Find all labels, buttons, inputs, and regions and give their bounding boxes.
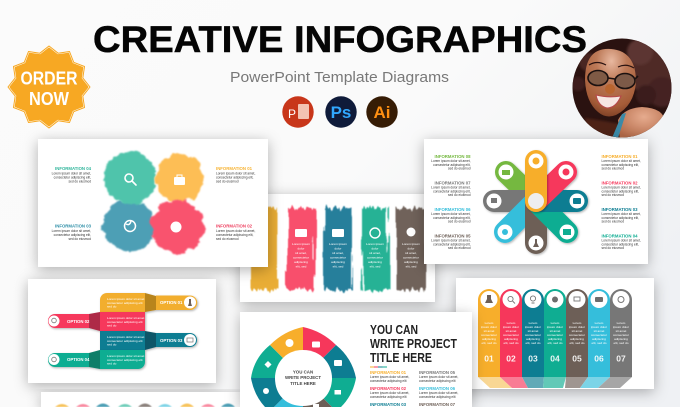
blue brush strip: consectetur [330,256,346,260]
column 03: elit, sed do [526,341,541,345]
column 02 [500,289,522,377]
column 06: adipiscing [592,337,606,341]
option 04 ribbon: Lorem ipsum dolor sit amet [107,354,144,358]
column 05: elit, sed do [570,341,585,345]
red brush strip: sit amet, [295,251,307,255]
column 03: consectetur [525,333,541,337]
information 05: Lorem ipsum dolor sit amet, [419,375,458,379]
text: information 03: sed do eiusmod [68,237,91,241]
column 07: sit amet [616,329,627,333]
text: information 04 right [602,234,641,250]
icon: globe [124,220,136,232]
green brush strip: Lorem ipsum [366,242,384,246]
column 02: adipiscing [504,337,518,341]
column 02: 02 [506,354,516,364]
column 06: 06 [594,354,604,364]
slide: ribbon options [28,279,216,383]
text: information 01 right: sed do eiusmod [602,167,624,171]
option 03 ribbon: sed do [107,343,117,347]
text: information 01: Lorem ipsum dolor sit amet, [216,172,255,176]
slide: four watercolor blobs [38,139,268,267]
column 06: Lorem [595,321,603,325]
red blob [151,200,204,253]
information 05 [419,370,458,383]
option 03 ribbon [100,331,197,350]
green brush strip: consectetur [367,256,383,260]
order now badge [8,46,90,128]
option 02 ribbon: sed do [107,324,117,328]
text: information 05: sed do eiusmod [448,246,471,250]
project title line 2: WRITE PROJECT [370,337,457,351]
column 05 [566,289,588,377]
text: information 02: INFORMATION 02 [216,224,253,228]
text: information 05 [431,234,471,250]
green brush strip: sit amet, [369,251,381,255]
option 02 ribbon: OPTION 02 [67,319,90,324]
text: information 01 right: INFORMATION 01 [602,154,638,159]
option 01 ribbon: consectetur adipiscing elit [107,301,143,305]
order now badge: NOW [29,89,69,109]
column 01: elit, sed do [482,341,497,345]
column 01: ipsum dolor [481,325,497,329]
information 01: INFORMATION 01 [370,370,407,375]
text: information 04 [52,166,92,184]
option 04 ribbon: OPTION 04 [67,357,90,362]
column 04: adipiscing [548,337,562,341]
text: information 04 right: consectetur adipiscing elit, [602,242,639,246]
column 01 [478,289,500,377]
text: information 04 right: Lorem ipsum dolor sit amet, [602,238,641,242]
column 03: ipsum dolor [525,325,541,329]
option 04 ribbon: consectetur adipiscing elit [107,358,143,362]
text: information 03 right [602,207,641,224]
text: information 06: INFORMATION 06 [435,207,471,212]
column 05: sit amet [572,329,583,333]
text: information 04: Lorem ipsum dolor sit amet, [52,172,91,176]
blue brush strip: dolor [335,246,341,250]
icon: PowerPoint: P [288,107,296,121]
column 02: Lorem [507,321,515,325]
column 02: elit, sed do [504,341,519,345]
column 01: adipiscing [482,337,496,341]
title: CREATIVE INFOGRAPHICS [93,19,587,60]
option 01 ribbon: Lorem ipsum dolor sit amet [107,297,144,301]
text: information 03: consectetur adipiscing elit, [54,233,91,237]
text: information 06: Lorem ipsum dolor sit amet, [431,212,470,216]
petal diagram [486,150,584,250]
column 07: elit, sed do [614,341,629,345]
icon: Photoshop: Ps [331,103,351,122]
text: information 07: sed do eiusmod [448,193,471,197]
brown brush strip: elit, sed [406,264,417,268]
brown brush strip: Lorem ipsum [402,242,420,246]
wheel centre text: WRITE PROJECT [285,375,321,380]
option 04 ribbon [48,350,145,369]
text: information 05: consectetur adipiscing elit, [433,242,471,246]
column 04: ipsum dolor [547,325,563,329]
wheel diagram [251,327,356,407]
text: information 08: INFORMATION 08 [435,154,471,159]
column 04: sit amet [550,329,561,333]
text: information 01 [216,166,255,184]
text: information 02: Lorem ipsum dolor sit amet, [216,229,255,233]
column 03: adipiscing [526,337,540,341]
text: information 02 right: sed do eiusmod [602,193,624,197]
information 05: consectetur adipiscing elit [419,379,456,383]
brown brush strip [397,208,425,290]
order now badge: ORDER [20,68,78,88]
option 02 ribbon [48,312,145,331]
column 01: consectetur [481,333,497,337]
column 07: adipiscing [614,337,628,341]
yellow blob [156,154,204,202]
column 01: 01 [484,354,494,364]
column 07 [610,289,632,377]
text: information 01 right [602,154,641,171]
text: information 03 right: sed do eiusmod [602,220,624,224]
icon: magnifier [125,174,136,185]
column 02: ipsum dolor [503,325,519,329]
icon: Illustrator [366,96,398,128]
wheel centre text: TITLE HERE [290,381,316,386]
text: information 02 right: INFORMATION 02 [602,180,638,186]
text: information 01: sed do eiusmod [216,180,239,184]
text: information 07: Lorem ipsum dolor sit amet, [431,186,470,190]
text: information 03 right: INFORMATION 03 [602,207,638,212]
information 01 [370,370,409,383]
text: information 06: sed do eiusmod [448,220,471,224]
option 01 ribbon: OPTION 01 [160,300,183,305]
information 01: Lorem ipsum dolor sit amet, [370,375,409,379]
text: information 01 right: consectetur adipiscing elit, [602,163,639,167]
text: information 08: sed do eiusmod [448,167,471,171]
text: information 03: INFORMATION 03 [55,224,92,228]
column 05: 05 [572,354,582,364]
column 03: Lorem [529,321,537,325]
icon: briefcase [174,175,185,185]
column 04 [544,289,566,377]
color accent line [370,366,387,368]
blue brush strip: sit amet, [332,251,344,255]
text: information 02 right: consectetur adipiscing elit, [602,189,639,193]
column 06: consectetur [591,333,607,337]
text: information 04: consectetur adipiscing elit, [54,176,91,180]
option 03 ribbon: consectetur adipiscing elit [107,339,143,343]
icon: Photoshop [325,96,357,128]
information 06: Lorem ipsum dolor sit amet, [419,391,458,395]
column 03 [522,289,544,377]
column shadow trapezoids [478,377,632,388]
column 07: Lorem [617,321,625,325]
slide: seven numbered columns [456,278,654,389]
text: information 08: consectetur adipiscing elit, [433,163,471,167]
information 07: INFORMATION 07 [419,402,456,407]
brown brush strip: dolor [408,246,414,250]
information 06 [419,386,458,399]
icon: Illustrator: Ai [374,103,390,122]
column 04: elit, sed do [548,341,563,345]
information 02: Lorem ipsum dolor sit amet, [370,391,409,395]
column 07: ipsum dolor [613,325,629,329]
blue brush strip: Lorem ipsum [329,242,347,246]
blue blob [103,200,155,252]
red brush strip: adipiscing [294,260,308,264]
red brush strip: Lorem ipsum [292,242,310,246]
column 06: ipsum dolor [591,325,607,329]
information 02: consectetur adipiscing elit [370,395,407,399]
column 02: consectetur [503,333,519,337]
text: information 02 [216,224,255,241]
option 04 ribbon: sed do [107,362,117,366]
project title: YOU CAN [370,323,418,337]
text: information 05: Lorem ipsum dolor sit amet, [431,238,470,242]
brown brush strip: sit amet, [405,251,417,255]
red brush strip: elit, sed [296,264,307,268]
text: information 04 right: sed do eiusmod [602,246,624,250]
option 03 ribbon: Lorem ipsum dolor sit amet [107,335,144,339]
text: information 07: consectetur adipiscing elit, [433,189,471,193]
text: information 04 right: INFORMATION 04 [602,234,638,238]
information 02 [370,386,409,399]
wheel centre text: YOU CAN [293,370,313,374]
information 03: INFORMATION 03 [370,402,407,407]
slide: project wheel [240,312,472,407]
column 06 [588,289,610,377]
text: information 01: consectetur adipiscing elit, [216,176,253,180]
text: information 01: INFORMATION 01 [216,166,253,171]
blue brush strip [323,208,352,290]
icon: head [170,222,182,232]
subtitle: PowerPoint Template Diagrams [230,70,449,86]
text: information 06 [431,207,471,224]
slide: partially visible circles row [41,392,240,407]
column 05: ipsum dolor [569,325,585,329]
information 01: consectetur adipiscing elit [370,379,407,383]
column 06: sit amet [594,329,605,333]
column 04: 04 [550,354,560,364]
text: information 05: INFORMATION 05 [435,234,471,238]
green brush strip [362,208,389,290]
column 01: sit amet [484,329,495,333]
text: information 08: Lorem ipsum dolor sit amet, [431,159,470,163]
text: information 03 right: Lorem ipsum dolor sit amet, [602,212,641,216]
information 02: INFORMATION 02 [370,386,407,391]
brown brush strip: consectetur [403,256,419,260]
text: information 02: consectetur adipiscing elit, [216,233,253,237]
text: information 01 right: Lorem ipsum dolor sit amet, [602,159,641,163]
teal blob [104,152,156,204]
information 06: INFORMATION 06 [419,386,456,391]
text: information 03 [52,224,92,241]
column 04: Lorem [551,321,559,325]
text: information 08 [431,154,471,171]
option 02 ribbon: Lorem ipsum dolor sit amet [107,316,144,320]
column 05: adipiscing [570,337,584,341]
red brush strip: dolor [298,246,304,250]
column 05: consectetur [569,333,585,337]
column 01: Lorem [485,321,493,325]
red brush strip: consectetur [293,256,309,260]
column 03: sit amet [528,329,539,333]
green brush strip: adipiscing [368,260,382,264]
text: information 07: INFORMATION 07 [435,180,471,186]
project title line 3: TITLE HERE [370,351,432,365]
slide: colored brush strips [240,194,435,302]
column 07: 07 [616,354,626,364]
brown brush strip: adipiscing [404,260,418,264]
text: information 07 [431,180,471,197]
text: information 04: INFORMATION 04 [55,166,92,171]
option 01 ribbon [100,293,197,312]
information 06: consectetur adipiscing elit [419,395,456,399]
column 07: consectetur [613,333,629,337]
column 06: elit, sed do [592,341,607,345]
information 05: INFORMATION 05 [419,370,456,375]
text: information 02 right: Lorem ipsum dolor sit amet, [602,186,641,190]
portrait avatar [571,38,677,140]
option 01 ribbon: sed do [107,305,117,309]
column 04: consectetur [547,333,563,337]
text: information 04: sed do eiusmod [68,180,91,184]
column 03: 03 [528,354,538,364]
text: information 06: consectetur adipiscing elit, [433,216,471,220]
column 02: sit amet [506,329,517,333]
green brush strip: dolor [372,246,378,250]
text: information 03 right: consectetur adipiscing elit, [602,216,639,220]
blue brush strip: elit, sed [333,264,344,268]
option 03 ribbon: OPTION 03 [160,338,183,343]
red brush strip [287,208,315,290]
text: information 02: sed do eiusmod [216,237,239,241]
green brush strip: elit, sed [370,264,381,268]
icon: PowerPoint [282,96,314,128]
yellow brush strip [250,208,278,290]
slide: radial petals [424,139,648,264]
text: information 03: Lorem ipsum dolor sit amet, [52,229,91,233]
option 02 ribbon: consectetur adipiscing elit [107,320,143,324]
blue brush strip: adipiscing [331,260,345,264]
column 05: Lorem [573,321,581,325]
text: information 02 right [602,180,641,197]
